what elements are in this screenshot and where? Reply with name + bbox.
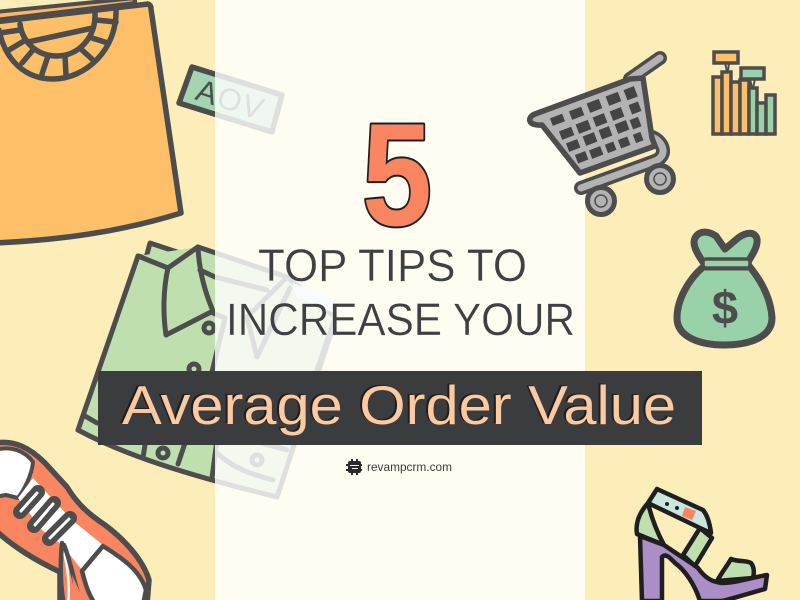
icon: sneaker xyxy=(0,442,149,600)
tag: AOV label: AOV xyxy=(192,72,269,127)
heading: top tips to: TOP TIPS TO xyxy=(258,240,527,291)
icon: bar chart with flags xyxy=(713,52,775,134)
icon: green shirt xyxy=(78,243,336,497)
banner: average order value: Average Order Value xyxy=(122,374,676,436)
tag: AOV label xyxy=(179,67,282,132)
logo: revampcrm: revampcrm.com xyxy=(367,462,452,474)
banner: average order value: Average Order Value xyxy=(120,373,674,435)
icon: high-heel sandal xyxy=(637,489,767,600)
title: number five: 5 xyxy=(362,93,432,256)
logo: revampcrm xyxy=(346,459,452,475)
icon: orange t-shirt xyxy=(0,0,181,243)
icon: money bag xyxy=(677,232,772,345)
heading: increase your: INCREASE YOUR xyxy=(226,294,575,345)
icon: money bag: $ xyxy=(712,281,738,334)
panel: centre column xyxy=(215,0,585,600)
icon: shopping cart xyxy=(530,58,674,214)
